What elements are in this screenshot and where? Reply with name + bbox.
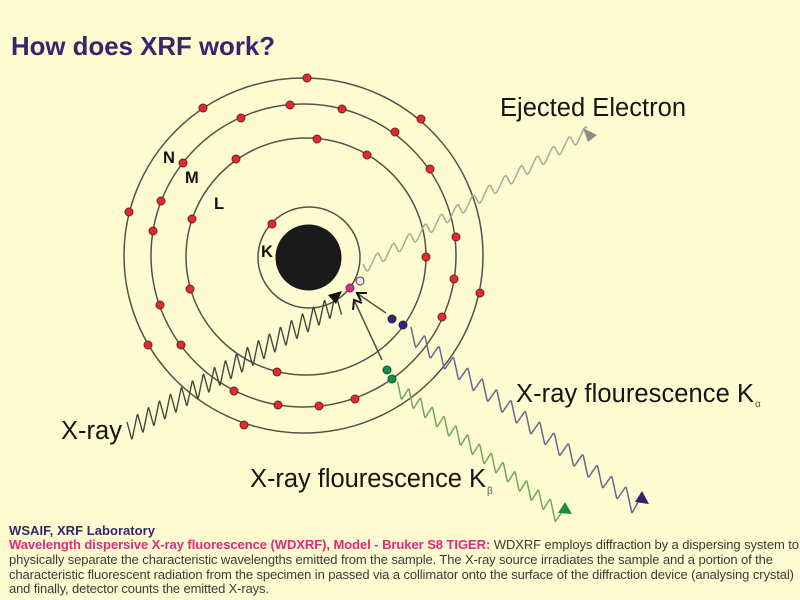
label: K-beta fluorescence: X-ray flourescence K (250, 465, 486, 493)
shell label L: L (214, 195, 224, 213)
title: How does XRF work? (11, 33, 275, 61)
atom diagram: shells, nucleus and electrons (124, 74, 484, 433)
wave tail to K-alpha arrowhead (632, 497, 641, 513)
label: K-alpha fluorescence: X-ray flourescence K (516, 380, 754, 408)
description paragraph: : WDXRF employs diffraction by a dispersing system to (486, 537, 799, 552)
green electrons (383, 366, 396, 383)
wave: fluorescence K-beta (398, 382, 555, 522)
label: X-ray: X-ray (61, 417, 122, 445)
description paragraph (9, 537, 799, 596)
arrowhead: incoming X-ray (328, 291, 342, 304)
wave tail to K-beta arrowhead (555, 509, 564, 522)
shell label M: M (185, 169, 199, 187)
description paragraph: characteristic fluorescent radiation from the specimen in passed via a collimator onto the surface of the diffraction device (analysing crystal) (9, 567, 794, 582)
arrowhead: K-beta (558, 502, 572, 514)
label: K-alpha fluorescence: α (755, 399, 761, 410)
wave: ejected electron (363, 127, 587, 271)
electron shells (124, 78, 483, 433)
description paragraph: physically separate the characteristic wavelengths emitted from the sample. The X-ray source irradiates the sample and a portion of the (9, 552, 773, 567)
laboratory heading: WSAIF, XRF Laboratory (9, 523, 156, 538)
transition arrow: purple electron to K shell (357, 293, 386, 313)
wave: fluorescence K-alpha (411, 327, 632, 513)
label: ejected electron: Ejected Electron (500, 94, 686, 122)
label: K-beta fluorescence: β (487, 486, 493, 497)
description paragraph: and finally, detector counts the emitted X-rays. (9, 581, 269, 596)
shell label N: N (163, 149, 175, 167)
arrowhead: ejected electron (583, 128, 597, 142)
arrowhead: K-alpha (635, 491, 649, 504)
transition arrow: green electron to K shell (353, 300, 382, 360)
red electrons (125, 74, 484, 429)
purple electrons (388, 315, 407, 329)
shell label K: K (261, 243, 273, 261)
description paragraph: Wavelength dispersive X-ray fluorescence (WDXRF), Model - Bruker S8 TIGER (9, 537, 487, 552)
wave: incoming X-ray (127, 294, 342, 439)
nucleus (276, 224, 342, 290)
vacated and excited K electrons (346, 277, 364, 292)
